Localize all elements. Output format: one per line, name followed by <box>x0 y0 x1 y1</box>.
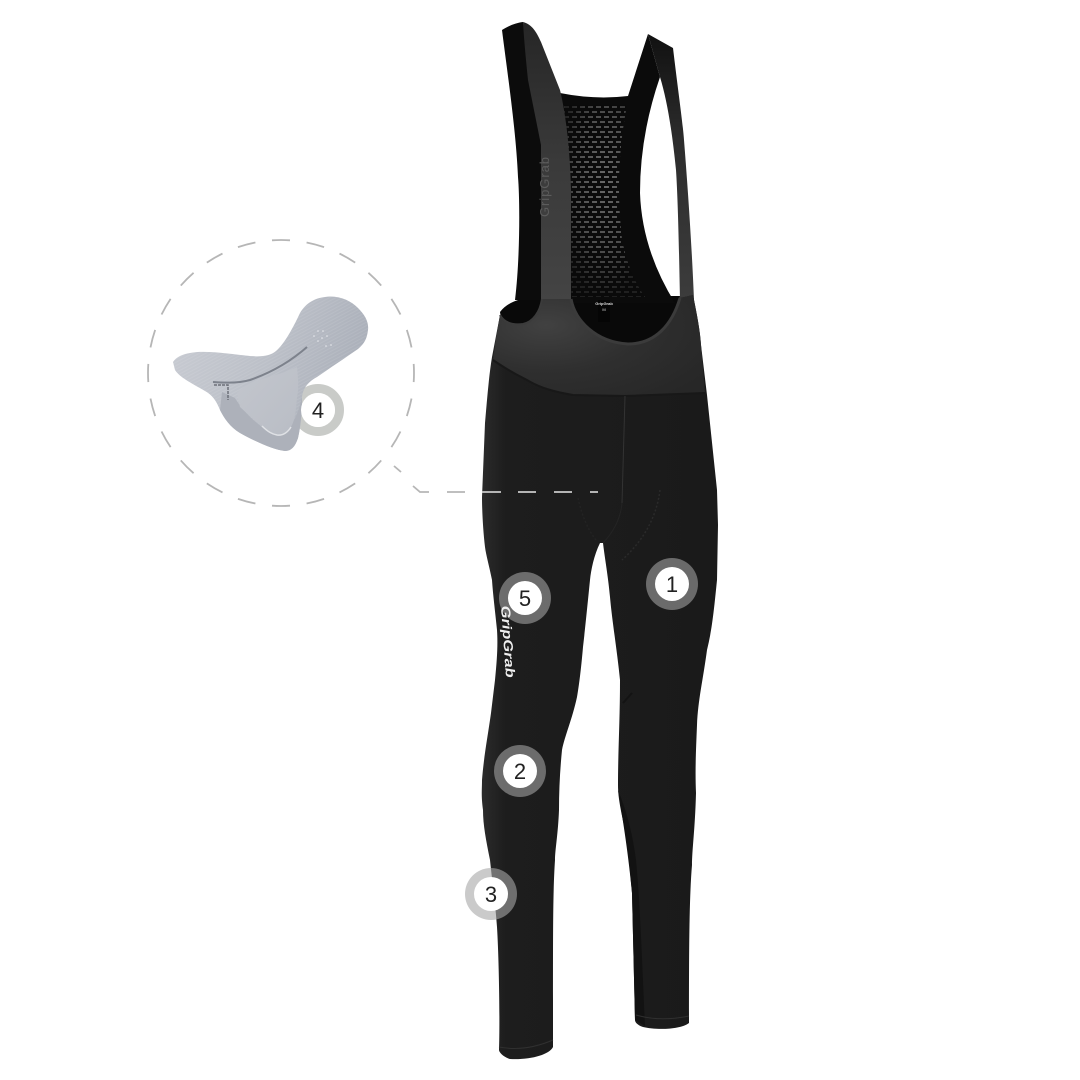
badge 2: 2 <box>514 759 526 784</box>
pad stitched label <box>214 385 228 400</box>
badge 1: 1 <box>666 572 678 597</box>
badge 3: 3 <box>485 882 497 907</box>
leg brand logo: GripGrab <box>498 605 518 678</box>
pad crease <box>213 347 307 383</box>
badge 2 <box>494 745 546 797</box>
pad perforations <box>313 330 332 347</box>
badge 3 <box>465 868 517 920</box>
connector dashes over tights <box>482 491 598 493</box>
badge 4 ring <box>296 388 340 432</box>
front left strap <box>523 22 571 304</box>
badge 1 <box>646 558 698 610</box>
badge 5: 5 <box>519 586 531 611</box>
badge 4 <box>301 393 335 427</box>
connector dashed line <box>394 466 465 492</box>
product: bib tights <box>482 22 718 1059</box>
badge 5 <box>499 572 551 624</box>
strap brand text: GripGrab <box>537 157 552 217</box>
chamois pad <box>173 297 368 451</box>
inner calf shading <box>618 790 645 1026</box>
right strap <box>648 34 694 300</box>
size tag: GripGrab <box>595 301 613 306</box>
left back strap <box>502 22 545 300</box>
tights body and legs <box>482 295 718 1059</box>
pad lower shadow <box>220 392 302 451</box>
size tag <box>595 300 613 322</box>
seams <box>493 298 705 1048</box>
pad outline <box>173 297 368 451</box>
pad raised centre <box>237 367 298 435</box>
mesh back <box>564 105 645 297</box>
dashed detail circle <box>148 240 414 506</box>
back panel <box>560 34 675 303</box>
pad centre rim highlight <box>262 426 291 435</box>
size tag: M <box>602 307 606 312</box>
badge 4: 4 <box>312 398 324 423</box>
neck and armhole openings <box>500 296 680 345</box>
upper waist panel <box>493 295 705 396</box>
